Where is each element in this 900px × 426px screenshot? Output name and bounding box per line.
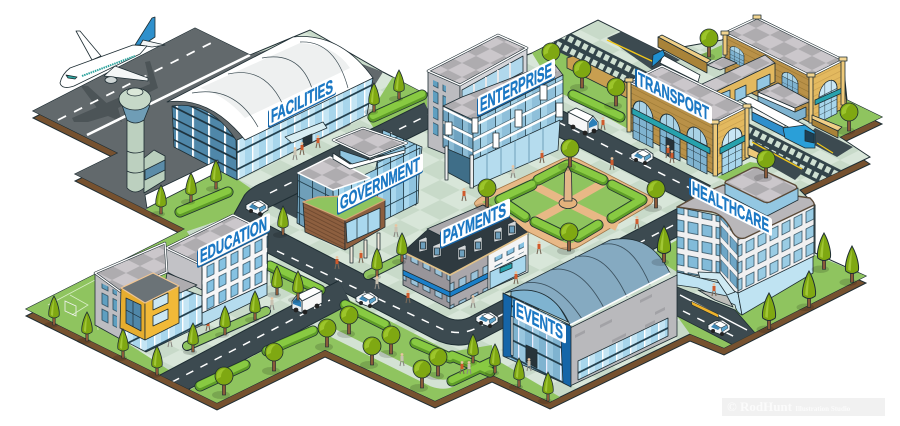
right teal band: [720, 135, 745, 154]
hedge side layer: [180, 95, 642, 386]
events arch glass: [511, 285, 568, 322]
engine: [105, 77, 117, 83]
white wing sign band: [500, 263, 512, 273]
cab roof: [119, 88, 151, 110]
healthcare right glass base: [738, 255, 813, 315]
annex windows: [145, 160, 165, 180]
brick patches: [575, 294, 665, 363]
sign: payments: PAYMENTS: [443, 199, 506, 249]
gov pillars: [350, 233, 380, 263]
north wing roof: [725, 18, 843, 76]
north wing left wall: [725, 33, 811, 123]
corner pillars: [627, 33, 845, 176]
road: south west: [150, 292, 345, 395]
yellow service line north: [607, 40, 654, 62]
runway solid line: [87, 55, 250, 135]
plane: [60, 17, 165, 87]
small roof: [707, 57, 737, 70]
fuselage: [60, 45, 147, 87]
grass: transport south: [717, 162, 768, 181]
control tower: [119, 88, 165, 193]
dark road east: [813, 128, 853, 157]
grass: junction patch: [270, 272, 307, 296]
events white jamb: [511, 316, 513, 356]
cab top: [127, 88, 143, 96]
shaft: [127, 120, 144, 192]
football pitch: [48, 280, 98, 330]
wood box glazing: [346, 208, 380, 243]
wood box left: [303, 202, 345, 250]
healthcare upper glass: [725, 183, 798, 216]
planter fill: [187, 258, 402, 346]
grass: by fence: [146, 172, 251, 232]
education grey block wall: [95, 273, 122, 340]
platform valance: [758, 92, 795, 112]
yellow left wall: [120, 288, 145, 340]
grass: west: [26, 229, 200, 378]
education grey wall: [166, 248, 202, 290]
roof shade band: [200, 43, 350, 118]
north wing teal band: [815, 88, 842, 105]
main arch three: [687, 123, 707, 174]
obelisk shaft: [564, 166, 572, 201]
payments right band: [450, 273, 488, 297]
fence: [145, 160, 218, 208]
tail fin: [135, 17, 155, 45]
upper train roof: [660, 55, 700, 82]
gov lower roof: [298, 157, 370, 190]
sign: government: GOVERNMENT: [340, 154, 420, 215]
dormers: [419, 221, 516, 260]
enterprise grey left wall: [428, 71, 460, 160]
plaza paving ring: [474, 158, 653, 250]
plane shadow: [72, 61, 158, 122]
road: government north: [245, 114, 430, 220]
gov top slab edge: [333, 128, 407, 157]
yellow left windows: [126, 298, 141, 331]
events blue corner: [560, 322, 571, 387]
gov back frame: [370, 130, 422, 205]
wood box right: [345, 200, 385, 250]
lower train side: [752, 112, 785, 137]
sign: transport: [635, 67, 712, 127]
watermark text: © RodHunt Illustration Studio: [727, 399, 851, 414]
gov right wall: [333, 148, 420, 245]
conifer trees: [44, 70, 859, 404]
road: healthcare south: [677, 287, 755, 347]
grass: upper centre: [367, 77, 427, 128]
education grey roof edge: [95, 243, 167, 292]
canopy: [285, 122, 327, 143]
healthcare curved wall: [720, 216, 738, 293]
payments white wing: [488, 233, 528, 290]
near wing: [104, 66, 148, 81]
sign: government: [337, 152, 423, 216]
grass: rail embankment: [532, 48, 627, 128]
events window strip: [578, 318, 668, 380]
north wing roof edge: [725, 18, 843, 76]
car healthcare road: [708, 320, 730, 336]
enterprise ground recess: [447, 146, 473, 186]
grass: healthcare west: [656, 240, 677, 272]
wall north top: [658, 35, 711, 63]
grass: near events: [492, 360, 560, 402]
passenger windows: [82, 56, 135, 76]
obelisk: [559, 166, 577, 208]
enterprise left windows: [433, 80, 446, 140]
education white roof edge: [166, 215, 268, 265]
wall north side: [658, 37, 707, 73]
sign: education: [197, 212, 270, 269]
enterprise ground mullions: [487, 128, 543, 181]
yellow service line south: [752, 142, 802, 169]
yellow right windows lower: [153, 309, 168, 326]
gov lower slab: [333, 148, 405, 169]
yellow service line west: [579, 56, 628, 79]
link windows: [735, 85, 746, 102]
enterprise right floors: [473, 75, 563, 160]
right arch: [722, 124, 742, 175]
payments right wall grey: [450, 255, 488, 309]
sign: facilities: FACILITIES: [271, 76, 333, 128]
plaza lawn: [482, 162, 648, 243]
building: government: [297, 128, 422, 263]
white van north: [568, 108, 598, 135]
education grey block roof: [95, 243, 167, 292]
grass: healthcare south: [677, 255, 866, 348]
footpath: [307, 320, 458, 384]
education inner roof: [165, 273, 197, 293]
train windscreen: [805, 130, 814, 143]
sign: events: EVENTS: [516, 299, 563, 344]
enterprise top roof edge: [428, 35, 527, 85]
payments trim: [403, 233, 528, 275]
main roof edge: [629, 66, 747, 123]
payments blue band: [403, 270, 450, 297]
yellow service line east: [817, 143, 833, 153]
shaft rings: [127, 151, 144, 173]
main right wall: [715, 107, 750, 175]
hedge top layer: [180, 94, 642, 385]
far wing: [76, 31, 101, 60]
facilities long wall: [237, 78, 373, 180]
healthcare lower roof: [677, 185, 814, 238]
glass entrance canopy: [698, 272, 735, 295]
main left wall: [629, 82, 715, 175]
main arch one: [633, 97, 653, 148]
roof ribs: [192, 42, 348, 127]
enterprise upper window band: [462, 56, 523, 104]
enterprise upper windows: [462, 56, 523, 104]
link windows: [757, 74, 770, 91]
planter strip: [187, 258, 402, 346]
lower train white upper: [752, 105, 785, 128]
hedge outline layer: [180, 95, 642, 386]
gov roof terrace glass: [340, 146, 405, 164]
grass: tree patch: [700, 45, 722, 60]
enterprise mid roof: [443, 62, 563, 120]
grass: lower strip: [178, 298, 492, 403]
building: enterprise: [428, 35, 563, 188]
service road south: [752, 140, 805, 180]
enterprise top roof: [428, 35, 527, 85]
healthcare top roof: [725, 168, 797, 202]
railway tracks: [554, 34, 842, 182]
yellow roof: [121, 273, 179, 303]
entrance ramp: [698, 290, 733, 307]
enterprise ground glazing: [473, 120, 560, 187]
cab glass: [122, 105, 150, 123]
building: healthcare: [677, 168, 814, 315]
payments roof slate: [403, 205, 528, 275]
enterprise upper mullions: [474, 63, 510, 98]
plaza cross paths: [527, 182, 617, 227]
education white roof: [166, 215, 268, 265]
main door: [666, 137, 674, 159]
white van south: [292, 287, 322, 314]
payments left wall: [403, 252, 450, 309]
car government road: [246, 200, 268, 216]
annex: [144, 150, 165, 193]
gov top slab: [333, 128, 407, 157]
grey block windows: [99, 282, 117, 331]
events door: [526, 345, 537, 368]
road: main loop: [262, 216, 690, 333]
bus stop strip on road: [691, 301, 719, 318]
sign: healthcare: HEALTHCARE: [692, 178, 769, 237]
education glass block: [123, 288, 202, 352]
vehicles: [246, 108, 730, 336]
north wing arch east: [782, 69, 798, 98]
building: payments: [403, 205, 528, 309]
education white front: [202, 232, 268, 313]
main roof: [629, 66, 747, 123]
wall west: [567, 56, 627, 98]
tailplane: [140, 40, 165, 47]
goal: [65, 301, 76, 316]
platform canopy: [758, 83, 811, 108]
sign: healthcare: [689, 176, 772, 239]
main arch two: [660, 110, 680, 161]
green roof: [303, 195, 385, 220]
facilities roof: [167, 37, 373, 140]
obelisk base: [559, 198, 577, 208]
sign: transport: TRANSPORT: [638, 69, 709, 125]
enterprise left floors: [443, 106, 473, 160]
wood box mullions: [357, 213, 368, 238]
road: government west stub: [272, 194, 298, 219]
blue arch: [652, 50, 665, 67]
building: facilities: [145, 37, 373, 208]
white wing glazing: [490, 255, 526, 289]
events right wall: [570, 275, 677, 386]
service road west: [570, 55, 640, 90]
healthcare right wall: [738, 203, 814, 293]
building: education: [95, 215, 268, 352]
watermark: [722, 398, 885, 416]
enterprise white panels: [445, 85, 563, 148]
conifers in front of education: [113, 291, 260, 378]
sign: payments: [440, 197, 510, 250]
roof ribs: [525, 244, 650, 319]
grass: transport east: [825, 100, 882, 137]
events barrel roof: [505, 239, 670, 325]
building: transport: [567, 15, 847, 176]
yellow left window bars: [126, 302, 141, 327]
service road north: [607, 30, 680, 72]
sign: events: [513, 298, 566, 346]
link wall: [715, 63, 775, 102]
healthcare left glass base: [677, 272, 742, 315]
building: events: [503, 239, 677, 387]
roof edge: [570, 273, 670, 325]
east wall side: [812, 119, 838, 138]
teal band: [632, 108, 710, 154]
gov left wall: [297, 173, 335, 245]
north wing right wall: [811, 60, 847, 123]
education glass base: [202, 283, 267, 325]
enterprise upper right wall: [460, 48, 527, 108]
events blue side: [503, 293, 512, 357]
tarmac apron: [33, 28, 383, 212]
yellow right windows: [153, 293, 168, 310]
lower train roof: [740, 96, 805, 128]
plaza: [474, 158, 653, 250]
watermark plate: [722, 398, 885, 416]
car events road: [476, 312, 498, 328]
sign: enterprise: ENTERPRISE: [480, 59, 552, 117]
sign: enterprise: [477, 58, 555, 118]
pitch lines: [48, 280, 98, 330]
north wing arch west: [730, 44, 744, 68]
payments roof flat: [427, 205, 497, 238]
sign: facilities: [268, 74, 336, 129]
link windows: [720, 90, 730, 104]
entrance door: [303, 134, 312, 146]
runway centre dashes: [58, 40, 217, 120]
people: [168, 117, 716, 374]
north wing arch right: [819, 77, 837, 123]
cockpit: [66, 75, 77, 79]
south wall: [748, 147, 760, 160]
hedges: [180, 94, 642, 386]
train cab: [783, 125, 815, 148]
road: enterprise plaza: [545, 116, 705, 197]
events facade: [503, 293, 570, 386]
sign: education: EDUCATION: [200, 213, 267, 268]
link roof: [700, 55, 775, 92]
pillar caps: [625, 15, 847, 124]
yellow right wall: [145, 286, 179, 340]
car main road: [356, 292, 378, 308]
enterprise front column: [470, 155, 474, 188]
east wall top: [812, 115, 842, 131]
facilities glass end: [172, 105, 237, 180]
platform glass: [758, 95, 806, 122]
round trees: [212, 43, 858, 399]
enterprise left column: [445, 146, 448, 180]
healthcare left wall: [677, 207, 720, 280]
car transport road: [631, 149, 653, 165]
white wing upper windows: [494, 242, 524, 268]
tree behind transport: [697, 29, 718, 61]
